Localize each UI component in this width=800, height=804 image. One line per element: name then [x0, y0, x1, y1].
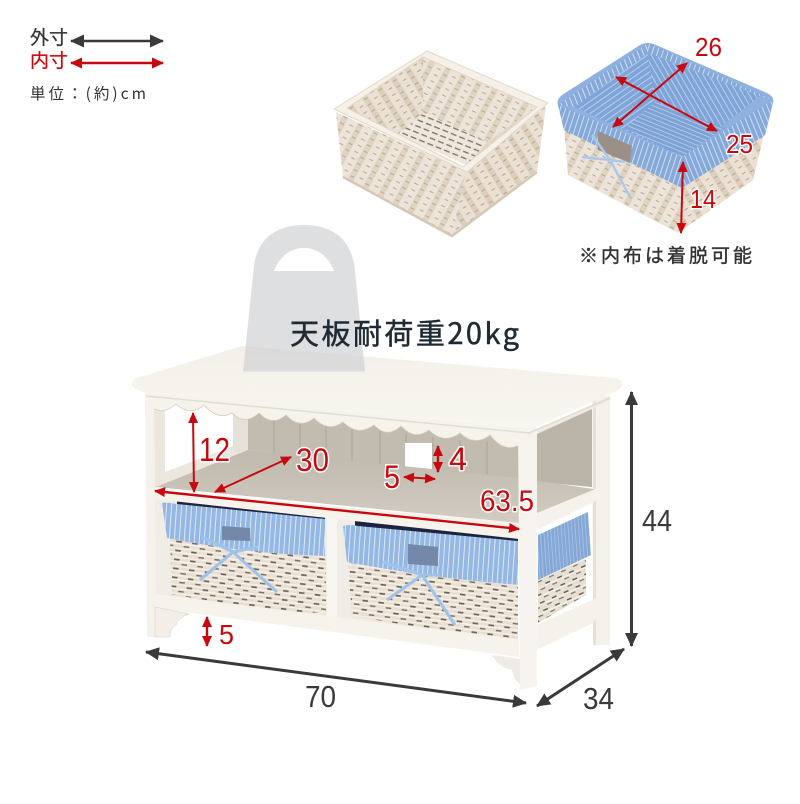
bench: right front post	[518, 425, 537, 690]
label: 34: 34	[583, 681, 614, 716]
basket: right outer face	[452, 106, 546, 236]
right basket: wicker	[348, 563, 518, 643]
legend: outer dimension arrow	[71, 40, 163, 42]
label: 63.5: 63.5	[480, 485, 534, 518]
basket: inner back-right wall	[423, 57, 537, 142]
legend: unit note: 単位：(約)cm	[30, 82, 146, 104]
bench: side apron	[537, 396, 610, 434]
left basket: base edge	[172, 596, 326, 616]
arrow: hole height 4	[437, 446, 439, 472]
removable lining note: ※内布は着脱可能	[579, 245, 752, 267]
arrow: hole width 5	[404, 477, 435, 479]
right basket: base edge	[352, 617, 518, 643]
left basket: dark inner top	[177, 500, 325, 525]
bench: side bottom rail	[537, 595, 603, 650]
left drawer basket	[162, 500, 326, 616]
label: 4: 4	[449, 441, 467, 477]
bench: center divider	[327, 517, 337, 622]
label: 14: 14	[690, 184, 716, 214]
basket: rim	[334, 51, 548, 172]
lined basket: outer cloth rim	[558, 43, 773, 188]
lined basket: right cloth fold	[682, 100, 773, 188]
lined basket: cloth floor	[625, 102, 725, 157]
bench: middle shelf	[156, 450, 600, 523]
bench: side top rail	[537, 483, 610, 530]
lined basket with inner dimensions	[558, 32, 773, 233]
arrow: shelf height 12	[193, 413, 194, 492]
bench: front scalloped apron	[145, 391, 537, 448]
bench: back post	[233, 405, 248, 452]
bench: side basket cloth	[538, 512, 591, 580]
legend: inner dimension arrow	[71, 62, 163, 64]
lined basket: top-right rim	[648, 43, 773, 100]
bench: left front post	[145, 390, 156, 637]
legend: outer dimension label: 外寸	[30, 27, 68, 49]
lined basket: ribbon bow	[582, 135, 630, 197]
basket: inner back-left wall	[347, 57, 463, 167]
bench: lower compartment back	[155, 495, 518, 645]
outer dimensions of bench	[146, 392, 672, 716]
bench	[132, 346, 623, 690]
basket: left outer face	[336, 112, 466, 236]
bench: table top	[132, 346, 623, 429]
bench: side basket wicker	[538, 558, 586, 623]
plain wicker basket	[334, 51, 548, 236]
bench: scallop outline	[154, 404, 517, 448]
arrow: basket height 14	[681, 162, 683, 233]
label: 30: 30	[296, 442, 329, 478]
arrow: overall depth 34	[537, 649, 624, 706]
label: 12: 12	[199, 431, 230, 468]
lined basket: handle cut-out	[598, 131, 632, 163]
lined basket: left wicker face	[564, 125, 682, 233]
label: 5 (clearance): 5	[219, 619, 234, 650]
bench: front bottom rail	[154, 594, 519, 657]
label: 26: 26	[695, 32, 722, 62]
bench: back panel grooves	[274, 420, 487, 478]
left basket: cloth	[162, 503, 325, 556]
right basket: handle cut-out	[408, 544, 438, 566]
bench: table top underside line	[146, 396, 610, 433]
arrow: basket depth 26	[613, 63, 687, 127]
right basket: ribbon bow	[383, 562, 455, 625]
label: 25: 25	[726, 129, 753, 159]
bench: rear right post	[592, 396, 610, 645]
bench: front top rail	[154, 490, 519, 539]
arrow: overall height 44	[630, 392, 633, 646]
label: 5 (hole): 5	[384, 459, 400, 495]
inner dimensions of bench	[155, 413, 534, 650]
bench: left window	[165, 402, 233, 472]
arrow: inner width 63.5	[155, 491, 519, 529]
arrow: shelf depth 30	[215, 457, 291, 492]
legend	[30, 27, 163, 104]
bench: cable hole	[405, 443, 432, 469]
arrow: leg clearance 5	[206, 617, 208, 646]
left basket: handle cut-out	[222, 526, 250, 541]
load capacity heading: 天板耐荷重20kg	[290, 311, 519, 353]
left basket: ribbon bow	[200, 537, 277, 592]
right basket: cloth	[343, 525, 518, 585]
legend: inner dimension label: 内寸	[30, 50, 68, 72]
right drawer basket	[343, 521, 518, 643]
basket: inner right wall	[463, 107, 537, 167]
bench: back panel	[248, 410, 519, 480]
bench: right foot bracket	[492, 655, 520, 684]
bench: side panel	[537, 409, 592, 487]
bench: left inner wall	[150, 400, 248, 490]
label: 44: 44	[642, 503, 672, 538]
lined basket: left cloth fold	[558, 105, 682, 188]
lined basket: top-left rim	[558, 43, 648, 107]
right basket: dark inner top	[355, 521, 518, 546]
lined basket: right wicker face	[678, 130, 765, 233]
bench: left foot bracket	[155, 607, 189, 637]
label: 70: 70	[305, 679, 336, 714]
basket: woven floor	[398, 113, 487, 165]
arrow: overall width 70	[146, 652, 526, 703]
lined basket: cloth inner left wall	[575, 53, 682, 157]
lined basket: cloth inner right wall	[648, 53, 760, 157]
load weight icon	[243, 225, 365, 372]
left basket: wicker	[170, 538, 326, 616]
arrow: basket width 25	[616, 77, 717, 131]
basket: base edge	[343, 172, 537, 236]
bench: rear post foot shade	[593, 400, 596, 645]
